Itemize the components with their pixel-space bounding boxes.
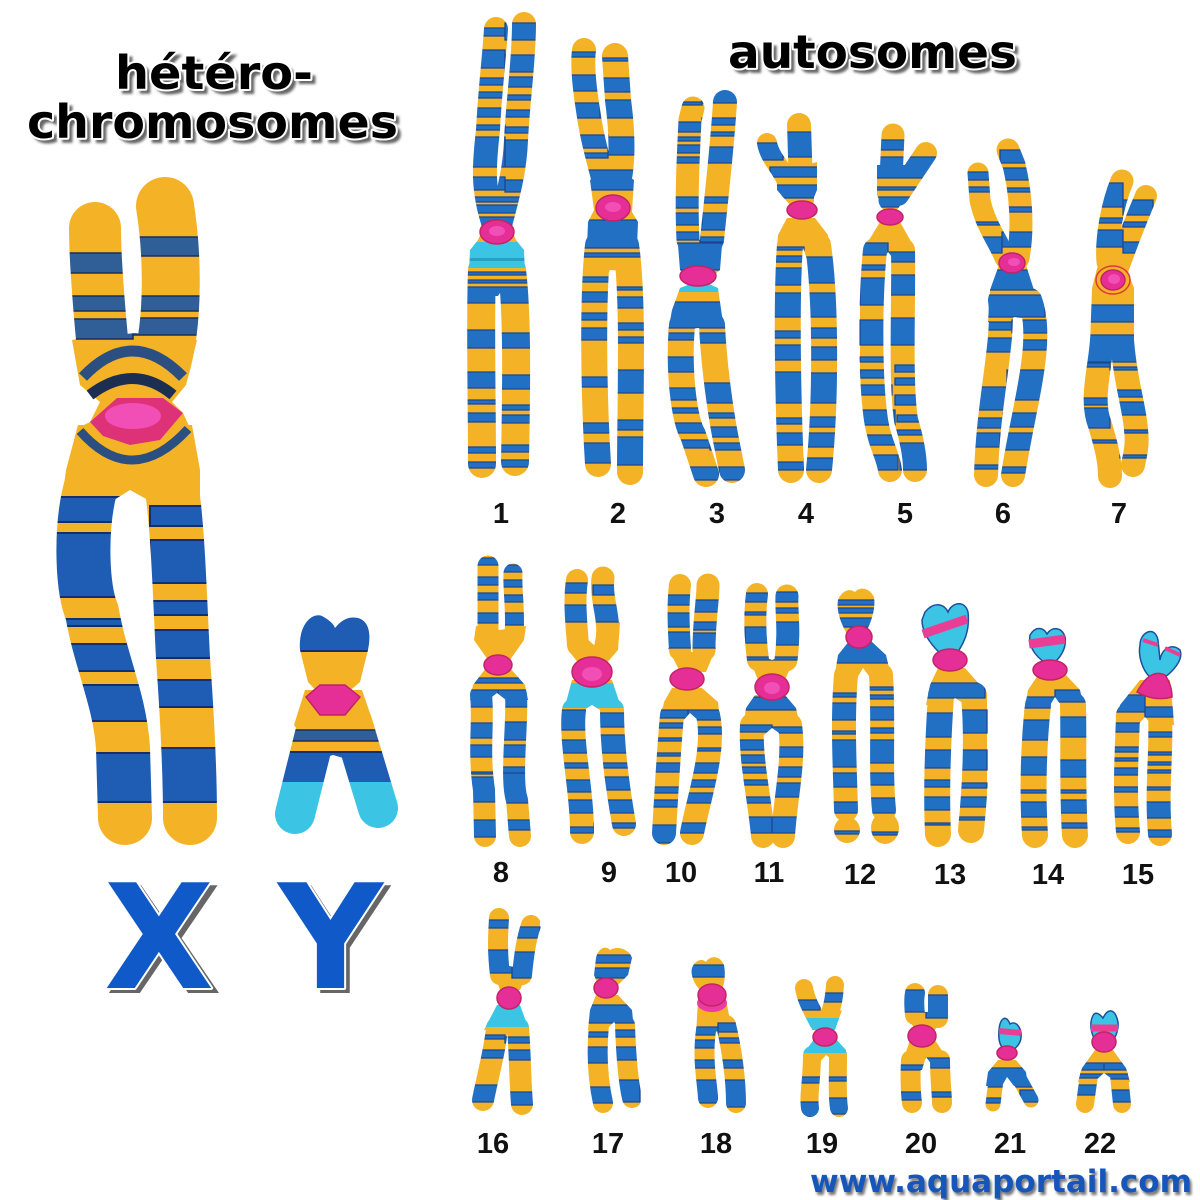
chromosome number labels: 20 xyxy=(905,1128,937,1160)
chromosome number labels: 21 xyxy=(994,1128,1026,1160)
chromosome 14 xyxy=(1018,628,1090,850)
chromosome number labels: 8 xyxy=(493,857,509,889)
cyan head 22 xyxy=(1091,1011,1118,1047)
chromosome 22 xyxy=(1076,1010,1131,1113)
heading: hétérochromosomes: chromosomes xyxy=(27,95,398,149)
chromosome X xyxy=(56,177,217,845)
chromosome 9 xyxy=(558,565,638,847)
chromosome number labels: 7 xyxy=(1111,498,1127,530)
chromosome number labels: 13 xyxy=(934,859,966,891)
heading: hétérochromosomes xyxy=(27,46,402,153)
centromere X xyxy=(90,398,183,445)
chromosome 21 xyxy=(986,1018,1038,1112)
chromosome number labels: 17 xyxy=(592,1128,624,1160)
letter Y: Y xyxy=(276,854,385,1023)
cyan head 13 xyxy=(922,604,968,662)
chromosome number labels: 12 xyxy=(844,859,876,891)
chromosome 12 xyxy=(830,585,902,847)
chromosome 10 xyxy=(650,572,725,848)
chromosome number labels: 6 xyxy=(995,498,1011,530)
chromosome 6 xyxy=(965,135,1050,490)
chromosome number labels: 4 xyxy=(798,498,814,530)
chromosome 15 xyxy=(1112,632,1181,850)
heading: hétérochromosomes: hétéro- xyxy=(115,46,313,100)
cyan head 15 xyxy=(1139,632,1181,677)
letter X: X xyxy=(104,854,214,1023)
chromosome 19 xyxy=(795,975,850,1120)
chromosome number labels xyxy=(477,498,1154,1160)
centromere Y xyxy=(306,685,360,715)
cyan head 14 xyxy=(1030,628,1065,665)
chromosome number labels: 14 xyxy=(1032,859,1064,891)
heading: hétérochromosomes: hétéro- xyxy=(119,50,317,104)
website credit: www.aquaportail.com xyxy=(810,1164,1192,1200)
chromosome 4 xyxy=(755,110,840,485)
chromosome 11 xyxy=(738,580,806,850)
chromosome number labels: 15 xyxy=(1122,859,1154,891)
chromosome number labels: 2 xyxy=(610,498,626,530)
chromosome 17 xyxy=(585,945,640,1115)
heading: autosomes: autosomes xyxy=(732,29,1021,83)
chromosome 7 xyxy=(1078,165,1158,490)
chromosome number labels: 9 xyxy=(601,857,617,889)
chromosome number labels: 18 xyxy=(700,1128,732,1160)
chromosome number labels: 3 xyxy=(709,498,725,530)
chromosome 1 xyxy=(467,12,536,478)
heading: hétérochromosomes: hétéro- xyxy=(115,46,313,100)
letter Y: Y xyxy=(276,854,385,1023)
chromosome 3 xyxy=(668,90,745,487)
heading: hétérochromosomes: chromosomes xyxy=(31,99,402,153)
heading: hétérochromosomes: chromosomes xyxy=(27,95,398,149)
chromosome number labels: 10 xyxy=(665,857,697,889)
cyan head 21 xyxy=(999,1018,1021,1052)
chromosome number labels: 16 xyxy=(477,1128,509,1160)
letter Y: Y xyxy=(280,858,390,1027)
heading: autosomes: autosomes xyxy=(728,25,1017,79)
chromosome 2 xyxy=(571,38,644,485)
chromosome number labels: 5 xyxy=(897,498,913,530)
chromosome 13 xyxy=(922,604,987,850)
chromosome 16 xyxy=(470,905,540,1117)
chromosome 20 xyxy=(900,983,952,1113)
chromosome 5 xyxy=(860,120,940,485)
chromosome number labels: 11 xyxy=(754,857,784,889)
chromosome 18 xyxy=(692,957,746,1113)
chromosome number labels: 1 xyxy=(493,498,509,530)
heading: autosomes: autosomes xyxy=(728,25,1017,79)
letter X: X xyxy=(104,854,214,1023)
letter X: X xyxy=(108,858,220,1027)
chromosome 8 xyxy=(470,556,531,847)
chromosome number labels: 19 xyxy=(806,1128,838,1160)
chromosome Y xyxy=(270,610,400,840)
chromosome number labels: 22 xyxy=(1084,1128,1116,1160)
